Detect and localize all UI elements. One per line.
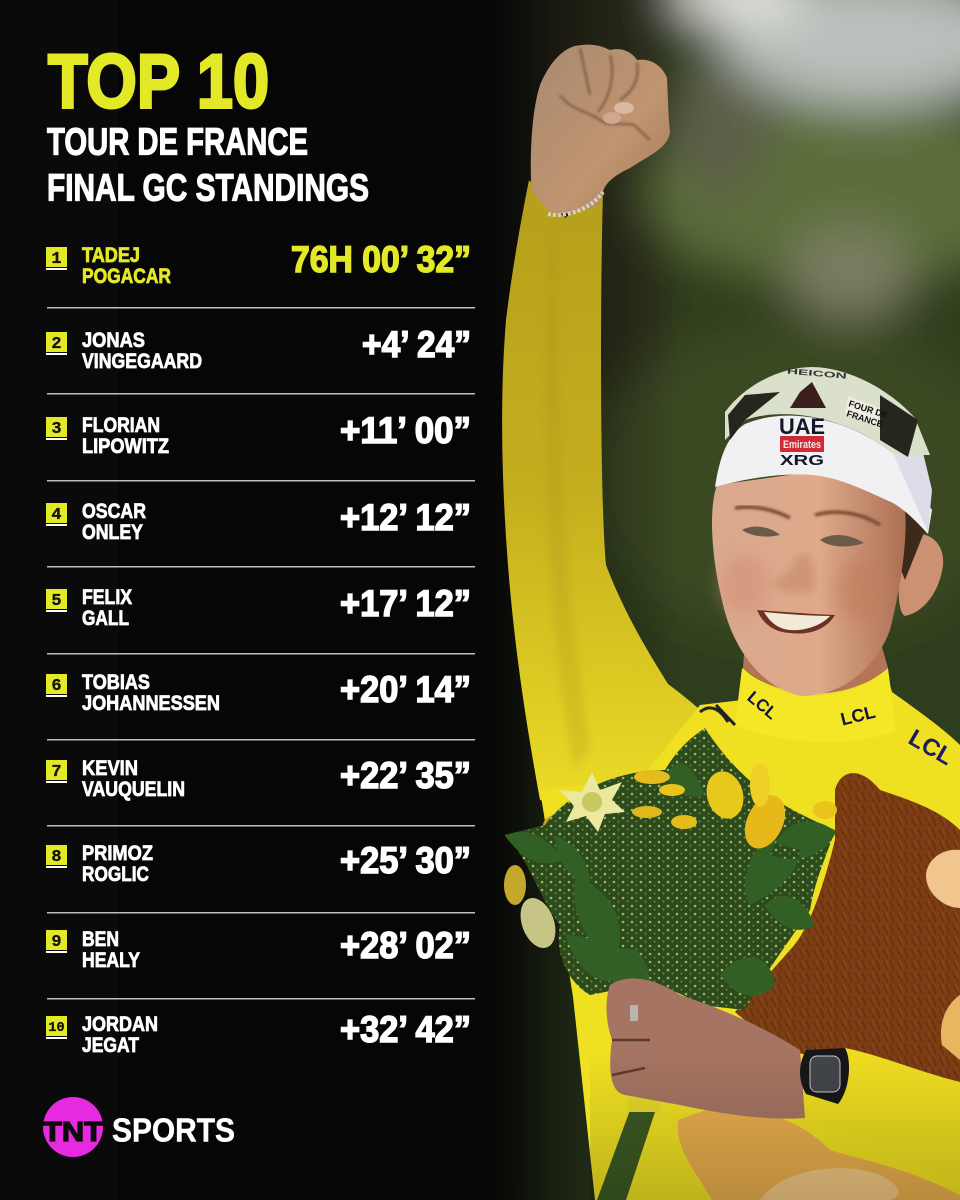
row 9: Healy: [46, 925, 471, 972]
row 5: Gall: 5: [51, 592, 62, 611]
hand holding bouquet: [606, 978, 849, 1119]
jersey collar and sponsor marks: LCL: [839, 702, 877, 730]
wristwatch: [800, 1048, 849, 1104]
row 6: Johannessen: TOBIAS: [82, 670, 150, 694]
row 5: Gall: +17’ 12”: [340, 583, 471, 624]
teddy: brown mane: [735, 773, 960, 1095]
row 3: Lipowitz: 3: [51, 420, 62, 439]
bouquet foliage: [505, 728, 835, 1010]
photo: rider Tadej Pogacar: [502, 45, 960, 1200]
row 4: Onley: ONLEY: [82, 520, 143, 544]
hair side: [895, 500, 925, 580]
row 1: Pogacar: [46, 239, 471, 288]
jersey collar and sponsor marks: [700, 668, 958, 771]
row 9: Healy: +28’ 02”: [340, 925, 471, 966]
row 8: Roglic: PRIMOZ: [82, 841, 153, 865]
raised yellow sleeve: [502, 180, 740, 830]
row 1: Pogacar: TADEJ: [82, 243, 140, 267]
row 9: Healy: HEALY: [82, 948, 140, 972]
row 6: Johannessen: [46, 669, 471, 715]
row 6: Johannessen: JOHANNESSEN: [82, 691, 220, 715]
jersey collar and sponsor marks: LCL: [904, 724, 958, 771]
nose: [773, 555, 815, 593]
white cycling cap: XRG: [780, 452, 824, 469]
row 1: Pogacar: 76H 00’ 32”: [291, 239, 471, 280]
TNT Sports logo: TNT: [43, 1116, 103, 1147]
row 3: Lipowitz: +11’ 00”: [340, 410, 471, 451]
sleeve fold shading: [545, 225, 590, 770]
row 6: Johannessen: 6: [51, 677, 62, 696]
row 8: Roglic: [46, 840, 471, 886]
soft shading at bottom of photo: [590, 1050, 960, 1200]
row 2: Vingegaard: VINGEGAARD: [82, 349, 202, 373]
neck: [743, 640, 888, 694]
bouquet leaves: [505, 763, 836, 996]
yellow tulips: [701, 767, 749, 823]
yellow chrysanthemum: [560, 772, 625, 832]
row 5: Gall: FELIX: [82, 585, 133, 609]
row 7: Vauquelin: 7: [51, 763, 62, 782]
row 1: Pogacar: POGACAR: [82, 264, 171, 288]
UAE Emirates XRG logo: UAE: [779, 414, 825, 439]
row 8: Roglic: ROGLIC: [82, 862, 149, 886]
subheading: Final GC standings: FINAL GC STANDINGS: [47, 168, 369, 210]
title block: [47, 40, 369, 210]
sunglasses on the cap: [725, 367, 930, 455]
row 3: Lipowitz: LIPOWITZ: [82, 434, 169, 458]
raised fist: [531, 45, 670, 215]
TNT Sports logo: [43, 1097, 235, 1157]
bouquet stems: [597, 1110, 655, 1200]
row 5: Gall: GALL: [82, 606, 129, 630]
white cycling cap: HEICON: [787, 367, 848, 381]
row 10: Jegat: +32’ 42”: [340, 1009, 471, 1050]
row 4: Onley: +12’ 12”: [340, 497, 471, 538]
row 2: Vingegaard: 2: [51, 335, 62, 354]
smile: [757, 610, 835, 634]
jersey collar and sponsor marks: LCL: [744, 687, 781, 723]
row 2: Vingegaard: +4’ 24”: [362, 324, 471, 365]
row 5: Gall: [46, 583, 471, 630]
white cycling cap: FRANCE: [845, 408, 884, 429]
white cycling cap: Emirates: [783, 439, 821, 451]
face: [712, 472, 906, 696]
white cycling cap: [715, 367, 932, 534]
bouquet of yellow flowers: [504, 728, 837, 1200]
SPORTS wordmark: SPORTS: [112, 1112, 235, 1148]
cheeks: [721, 555, 769, 615]
row 1: Pogacar: 1: [51, 250, 62, 269]
row 4: Onley: [46, 497, 471, 544]
row 2: Vingegaard: [46, 324, 471, 373]
ear: [899, 534, 943, 616]
small daisies: [634, 770, 670, 784]
heading: TOP 10: TOP 10: [48, 40, 269, 124]
arm holding bouquet: forearm sleeve: [800, 1048, 960, 1182]
row 9: Healy: 9: [51, 933, 62, 952]
row 10: Jegat: JORDAN: [82, 1012, 158, 1036]
row 4: Onley: OSCAR: [82, 499, 146, 523]
magenta TNT circle: [43, 1097, 103, 1157]
row 7: Vauquelin: +22’ 35”: [340, 755, 471, 796]
row 6: Johannessen: +20’ 14”: [340, 669, 471, 710]
brows: [735, 507, 880, 525]
row 8: Roglic: +25’ 30”: [340, 840, 471, 881]
row 3: Lipowitz: FLORIAN: [82, 413, 160, 437]
row 3: Lipowitz: [46, 410, 471, 458]
teddy: ears and paw: [926, 850, 960, 1060]
eyes: [742, 527, 864, 546]
row 10: Jegat: [46, 1009, 471, 1057]
yellow jersey torso: [540, 668, 960, 1200]
row 8: Roglic: 8: [51, 848, 62, 867]
teddy: light lower body: [678, 1105, 960, 1200]
row 10: Jegat: JEGAT: [82, 1033, 139, 1057]
white cycling cap: FOUR DE: [847, 398, 889, 420]
row 7: Vauquelin: [46, 755, 471, 801]
head: [712, 472, 943, 696]
subheading: Tour de France: TOUR DE FRANCE: [47, 122, 308, 164]
row 10: Jegat: 10: [48, 1021, 65, 1036]
row 7: Vauquelin: VAUQUELIN: [82, 777, 185, 801]
row 4: Onley: 4: [51, 506, 62, 525]
row 7: Vauquelin: KEVIN: [82, 756, 138, 780]
row 2: Vingegaard: JONAS: [82, 328, 145, 352]
standings table: [46, 239, 475, 1057]
side flowers: [504, 865, 526, 905]
row 9: Healy: BEN: [82, 927, 119, 951]
